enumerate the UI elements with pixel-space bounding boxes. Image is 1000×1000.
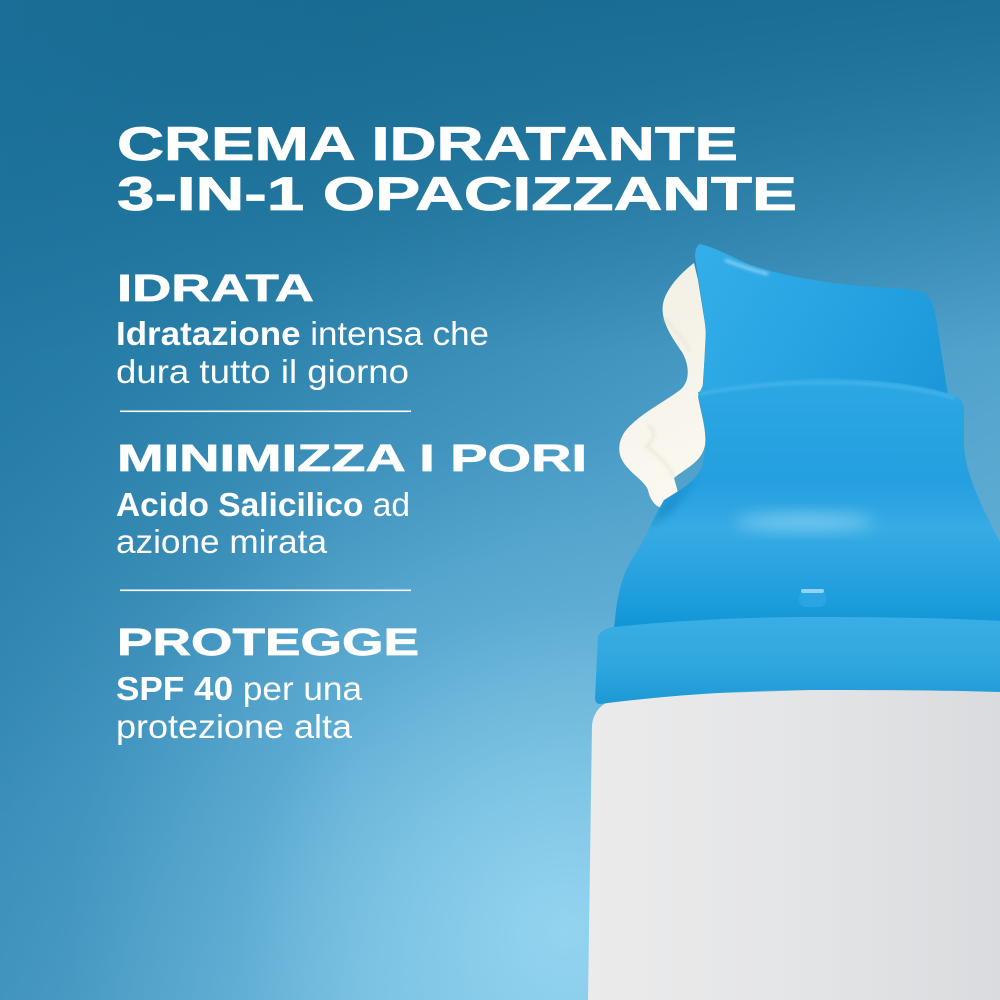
section: protegge: protezione alta xyxy=(116,708,353,745)
section: idrata: dura tutto il giorno xyxy=(116,353,409,390)
section: minimizza i pori: azione mirata xyxy=(116,523,328,560)
section: protegge xyxy=(116,622,419,745)
section: minimizza i pori: Acido Salicilico ad xyxy=(116,486,410,523)
cream swirl xyxy=(619,263,706,508)
section: protegge: SPF 40 per una xyxy=(116,670,363,707)
title xyxy=(117,117,797,220)
section: idrata: IDRATA xyxy=(117,268,314,310)
pump nozzle xyxy=(695,244,948,395)
bottle body xyxy=(588,684,1000,1000)
title: 3-IN-1 OPACIZZANTE xyxy=(117,167,797,220)
cap collar ring xyxy=(595,617,1000,704)
title: CREMA IDRATANTE xyxy=(117,117,738,170)
lower cap shoulder xyxy=(612,378,1000,640)
section: minimizza i pori: MINIMIZZA I PORI xyxy=(117,438,587,480)
section: idrata: Idratazione intensa che xyxy=(116,315,489,352)
section: protegge: PROTEGGE xyxy=(117,622,419,664)
section: idrata xyxy=(116,268,489,390)
product: bottle with blue pump cap xyxy=(588,244,1000,1000)
small cap notch xyxy=(799,589,826,607)
section: minimizza i pori xyxy=(116,438,587,560)
